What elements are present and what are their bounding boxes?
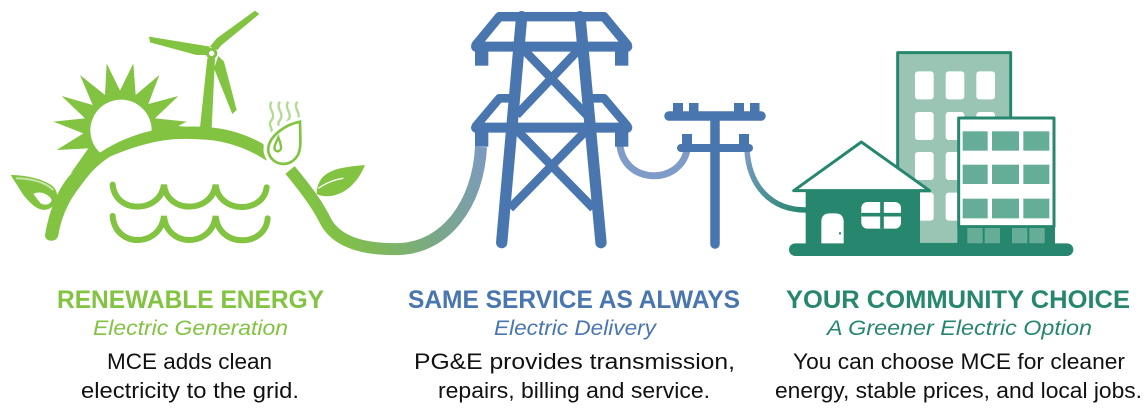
column: community choice <box>775 286 1142 403</box>
body text: repairs, billing and service. <box>438 378 710 403</box>
ground line <box>789 243 1073 256</box>
body text: PG&E provides transmission, <box>414 349 735 374</box>
power line: hill to transmission tower <box>290 147 481 249</box>
subheading: A Greener Electric Option <box>825 316 1092 340</box>
illustration: renewable energy hill <box>11 11 365 241</box>
body text: energy, stable prices, and local jobs. <box>775 378 1142 403</box>
illustration: community buildings <box>789 53 1073 256</box>
heading: RENEWABLE ENERGY <box>57 286 324 314</box>
tall apartment building <box>898 53 1011 244</box>
heading: SAME SERVICE AS ALWAYS <box>408 286 740 314</box>
column: same service <box>408 286 740 403</box>
heading: YOUR COMMUNITY CHOICE <box>786 286 1130 314</box>
waves <box>113 185 268 240</box>
power line: tower to utility pole <box>620 146 687 176</box>
icon: biogas drop with steam <box>268 102 300 164</box>
icon: left leaf <box>11 175 57 210</box>
body text: You can choose MCE for cleaner <box>793 349 1126 374</box>
front office building <box>957 118 1055 244</box>
power line: pole to house <box>747 150 806 210</box>
subheading: Electric Delivery <box>494 316 657 340</box>
body text: MCE adds clean <box>107 349 272 374</box>
body text <box>81 349 299 403</box>
column: renewable energy <box>57 286 324 403</box>
body text <box>775 349 1142 403</box>
body text <box>414 349 735 403</box>
icon: wind turbine <box>149 11 259 128</box>
icon: right leaf <box>317 165 365 196</box>
hill arc <box>45 126 267 241</box>
house <box>794 142 930 244</box>
subheading: Electric Generation <box>93 316 288 340</box>
body text: electricity to the grid. <box>81 378 299 403</box>
illustration: utility pole <box>669 103 761 244</box>
illustration: transmission tower <box>475 17 628 243</box>
icon: sun <box>53 63 200 173</box>
